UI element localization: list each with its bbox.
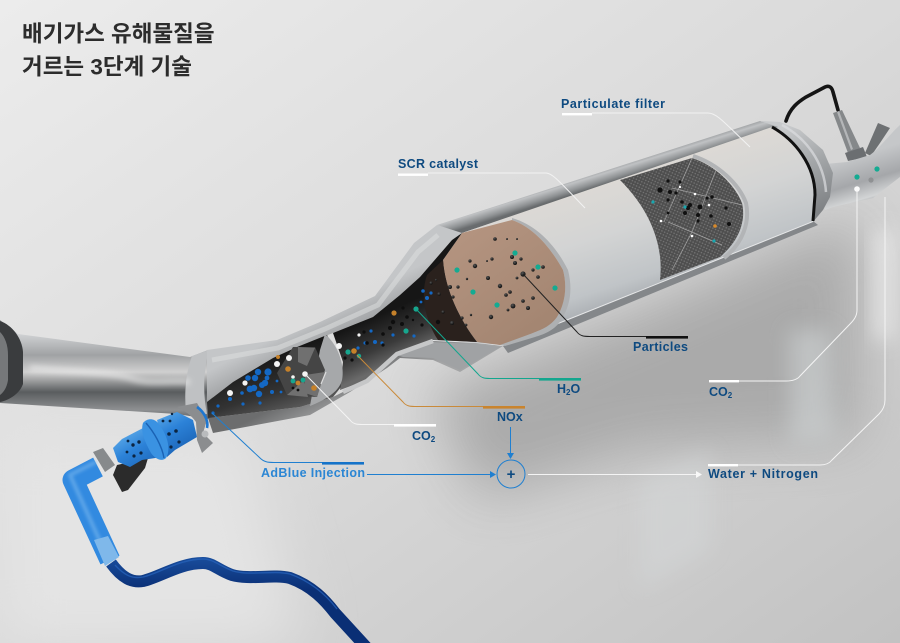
title: 배기가스 유해물질을 bbox=[22, 22, 215, 46]
lower lip bbox=[208, 340, 503, 433]
flange bbox=[142, 419, 168, 460]
injector bracket bbox=[113, 458, 148, 492]
callout: H2O: 2 bbox=[566, 388, 571, 397]
callout: AdBlue Injection: AdBlue Injection bbox=[261, 466, 365, 480]
dark blue hose bbox=[111, 563, 367, 643]
pipe collar bbox=[185, 350, 209, 414]
silencer substrate bbox=[462, 127, 815, 345]
orange molecules bbox=[276, 310, 397, 391]
sensor body bbox=[833, 110, 867, 161]
gas particles in mixer bbox=[211, 289, 440, 415]
particles on SCR face bbox=[429, 237, 558, 326]
mixer blades bbox=[277, 347, 325, 397]
silencer top band bbox=[437, 121, 778, 233]
adblue droplets bbox=[211, 289, 433, 415]
hose coupling bbox=[93, 448, 115, 472]
callout: CO2 from mixer: 2 bbox=[431, 435, 436, 444]
highlight on pipe bbox=[30, 368, 190, 382]
rear barrel bbox=[157, 412, 197, 457]
flare under silencer bbox=[397, 342, 500, 370]
callout: CO2 at outlet: 2 bbox=[728, 391, 733, 400]
elbow fitting bbox=[73, 467, 110, 560]
callout: H2O bbox=[416, 309, 581, 397]
black soot bbox=[292, 306, 440, 391]
outlet pipe and sensor bbox=[762, 86, 900, 222]
nozzle body bbox=[113, 427, 162, 467]
particulate filter face bbox=[620, 156, 747, 280]
arrow: NOx to mixing node bbox=[507, 427, 514, 459]
dark substrate edge bbox=[424, 260, 477, 342]
callout: Particulate filter bbox=[561, 97, 750, 147]
dark seam at end bbox=[772, 127, 815, 221]
callout: CO2 at outlet: CO bbox=[709, 385, 728, 399]
callout: H2O: O bbox=[570, 382, 580, 396]
chamber lower rim bbox=[343, 341, 433, 392]
callout: Water + Nitrogen bbox=[708, 197, 885, 481]
upper cone shell bbox=[207, 225, 462, 402]
callout: AdBlue Injection bbox=[212, 413, 365, 480]
arrow: output to Water + Nitrogen bbox=[528, 471, 702, 478]
end cap of silencer bbox=[762, 121, 833, 222]
arrow: AdBlue to mixing node bbox=[367, 471, 496, 478]
perforation holes bbox=[126, 413, 181, 458]
silencer bottom strip bbox=[503, 221, 818, 353]
callout: Particles bbox=[523, 274, 688, 354]
callout: CO2 from mixer bbox=[305, 374, 436, 444]
callout: Particles: Particles bbox=[633, 340, 688, 354]
lip bright edge bbox=[397, 221, 813, 353]
callout: Particulate filter: Particulate filter bbox=[561, 97, 665, 111]
blue AdBlue injector bbox=[70, 403, 367, 643]
callout: NOx bbox=[357, 355, 525, 424]
callout: CO2 from mixer: CO bbox=[412, 429, 431, 443]
first chamber interior bbox=[207, 334, 343, 418]
pipe flange bbox=[0, 321, 23, 402]
callout: SCR catalyst: SCR catalyst bbox=[398, 157, 479, 171]
white molecules bbox=[227, 333, 361, 396]
outlet tube bbox=[825, 125, 900, 210]
callout: CO2 at outlet bbox=[709, 190, 857, 400]
title bbox=[22, 22, 215, 80]
callout: H2O: H bbox=[557, 382, 566, 396]
filter particles bbox=[657, 179, 731, 226]
teal molecules bbox=[291, 306, 419, 383]
main catalytic converter housing bbox=[207, 121, 818, 433]
sleeve bbox=[94, 536, 119, 566]
second chamber interior bbox=[333, 233, 477, 392]
mixing node plus bbox=[497, 460, 525, 488]
callout: Water + Nitrogen: Water + Nitrogen bbox=[708, 467, 818, 481]
mixer cone bbox=[310, 334, 343, 406]
callout: NOx: NOx bbox=[497, 410, 523, 424]
mixing node plus: + bbox=[507, 466, 516, 483]
title: 거르는 3단계 기술 bbox=[22, 54, 192, 80]
sensor cable bbox=[786, 86, 838, 121]
SCR catalyst face bbox=[443, 218, 570, 346]
callout: SCR catalyst bbox=[398, 157, 585, 208]
inlet pipe from the left bbox=[0, 320, 215, 420]
cone highlight bbox=[212, 235, 438, 360]
exit gas molecules bbox=[854, 166, 880, 192]
clamp bbox=[177, 403, 213, 453]
outlet clamp bbox=[865, 123, 890, 156]
